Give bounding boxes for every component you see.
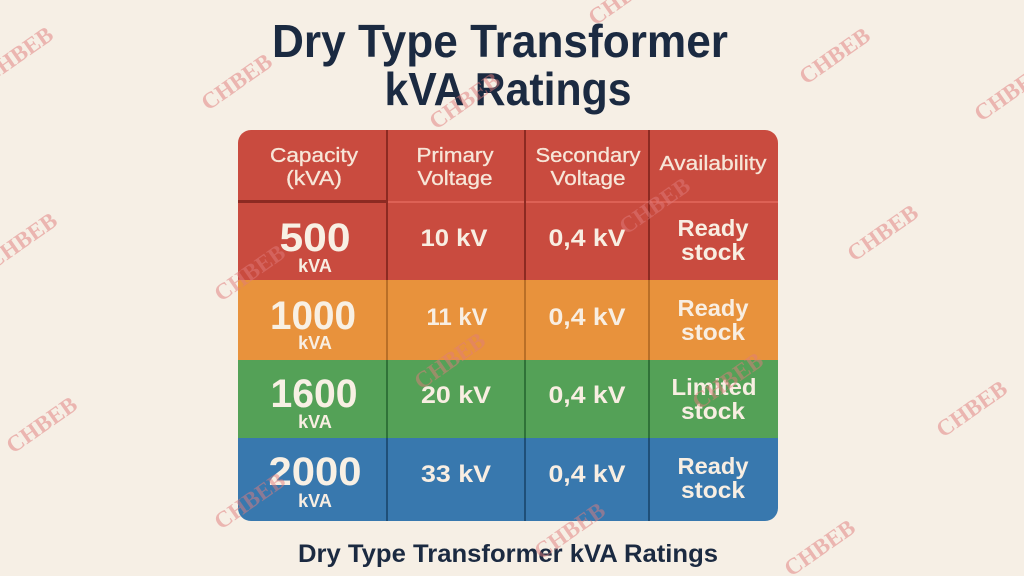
row: 500 kVA: 10 kV	[420, 225, 488, 252]
row: 500 kVA: Ready	[678, 215, 749, 241]
row: 1600 kVA: 20 kV	[421, 382, 491, 409]
watermarks: CHBEB	[615, 173, 695, 239]
watermarks: CHBEB	[688, 348, 768, 414]
watermarks: CHBEB	[2, 392, 82, 458]
row: 500 kVA: 0,4 kV	[548, 225, 626, 252]
row: 1600 kVA: Limited	[672, 374, 756, 400]
watermarks: CHBEB	[210, 468, 290, 534]
row: 1000 kVA: 1000	[270, 294, 356, 338]
header row: Availability	[660, 153, 766, 175]
row: 2000 kVA: Ready	[678, 453, 749, 479]
row: 2000 kVA: 33 kV	[421, 461, 491, 488]
row: 1000 kVA: Ready	[678, 295, 749, 321]
row: 500 kVA: 500	[280, 216, 350, 260]
table row backgrounds	[238, 130, 778, 521]
row: 2000 kVA: 2000	[268, 450, 362, 494]
header row: (kVA)	[286, 168, 342, 190]
caption: Dry Type Transformer kVA Ratings	[298, 540, 718, 568]
row: 1600 kVA: stock	[681, 398, 745, 424]
title: Dry Type Transformer	[272, 15, 728, 67]
row: 2000 kVA	[268, 450, 749, 511]
header row: Voltage	[550, 168, 626, 190]
header row: Secondary	[536, 145, 640, 167]
header row: Primary	[416, 145, 494, 167]
row: 1000 kVA: kVA	[298, 333, 332, 353]
header row: Voltage	[418, 168, 492, 190]
watermarks: CHBEB	[197, 49, 277, 115]
row: 1000 kVA: 0,4 kV	[548, 304, 626, 331]
row: 500 kVA	[280, 215, 749, 276]
watermarks: CHBEB	[410, 328, 490, 394]
header row	[270, 145, 766, 190]
row: 2000 kVA: 0,4 kV	[548, 461, 626, 488]
row: 2000 kVA: stock	[681, 477, 745, 503]
row: 1600 kVA	[270, 372, 756, 432]
watermarks: CHBEB	[932, 376, 1012, 442]
watermarks: CHBEB	[210, 240, 290, 306]
header row: Capacity	[270, 145, 358, 167]
title: kVA Ratings	[384, 63, 632, 115]
row: 1600 kVA: kVA	[298, 412, 332, 432]
row: 1600 kVA: 1600	[270, 372, 358, 416]
watermarks: CHBEB	[795, 23, 875, 89]
ratings table	[238, 130, 778, 521]
watermarks: CHBEB	[843, 200, 923, 266]
row: 1000 kVA	[270, 294, 749, 353]
row: 500 kVA: kVA	[298, 256, 332, 276]
row: 2000 kVA: kVA	[298, 491, 332, 511]
title	[272, 15, 728, 115]
row: 1000 kVA: 11 kV	[426, 304, 488, 331]
row: 1600 kVA: 0,4 kV	[548, 382, 626, 409]
watermarks: CHBEB	[530, 498, 610, 564]
row: 500 kVA: stock	[681, 239, 745, 265]
watermarks: CHBEB	[425, 68, 505, 134]
row: 1000 kVA: stock	[681, 319, 745, 345]
